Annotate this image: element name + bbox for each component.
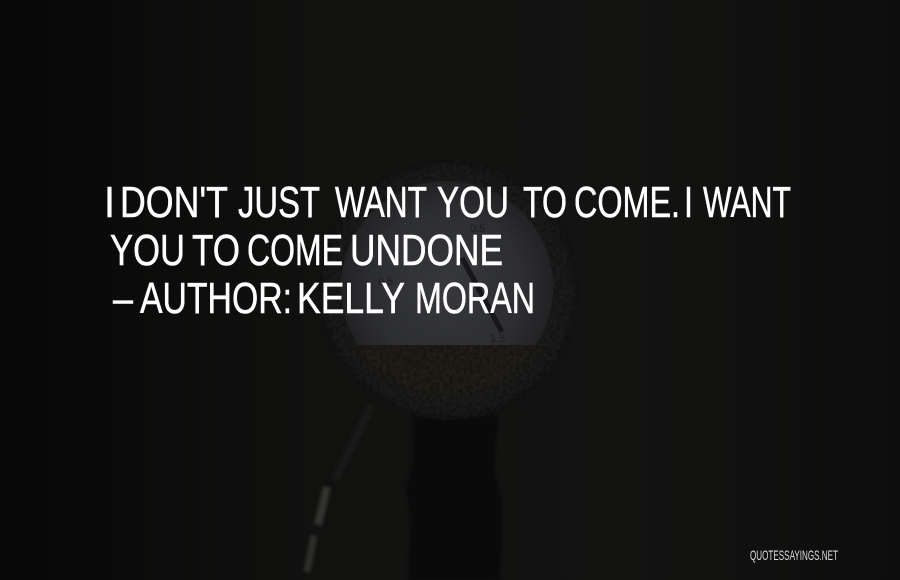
gauge scale numbers: 0.5 bbox=[470, 223, 485, 235]
gauge needle bbox=[462, 258, 502, 332]
quote line 1 bbox=[104, 178, 791, 227]
gauge wire bbox=[307, 405, 372, 572]
quote line 1: TO bbox=[523, 178, 567, 227]
quote line 2: TO bbox=[192, 226, 240, 275]
gauge scale numbers: 1.5 bbox=[490, 333, 505, 345]
quote line 1: I bbox=[684, 178, 693, 227]
quote line 2: COME bbox=[247, 226, 343, 275]
author line bbox=[113, 274, 535, 323]
quote line 2 bbox=[110, 226, 503, 275]
author line: – bbox=[113, 274, 133, 323]
quote line 2: UNDONE bbox=[350, 226, 503, 275]
gauge pipe bbox=[406, 415, 502, 580]
quote line 1: WANT bbox=[335, 178, 427, 227]
quote card bbox=[107, 162, 838, 574]
gauge scale numbers bbox=[378, 223, 505, 345]
quote line 1: WANT bbox=[703, 178, 791, 227]
quote line 1: DON'T bbox=[120, 178, 228, 227]
author line: KELLY bbox=[297, 274, 405, 323]
gauge scale numbers: 0.5 bbox=[378, 276, 393, 288]
quote line 1: I bbox=[104, 178, 115, 227]
quote line 1: YOU bbox=[437, 178, 509, 227]
gauge rim bbox=[319, 160, 579, 420]
quote line 2: YOU bbox=[110, 226, 185, 275]
gauge dial bbox=[341, 181, 553, 345]
author line: MORAN bbox=[415, 274, 535, 323]
quote line 1: COME. bbox=[574, 178, 680, 227]
quote text bbox=[104, 178, 791, 323]
background photo: pressure gauge bbox=[307, 160, 579, 580]
gauge rust plate bbox=[339, 179, 555, 395]
watermark: QUOTESSAYINGS.NET bbox=[750, 547, 838, 563]
quote line 1: JUST bbox=[238, 178, 320, 227]
author line: AUTHOR: bbox=[140, 274, 292, 323]
